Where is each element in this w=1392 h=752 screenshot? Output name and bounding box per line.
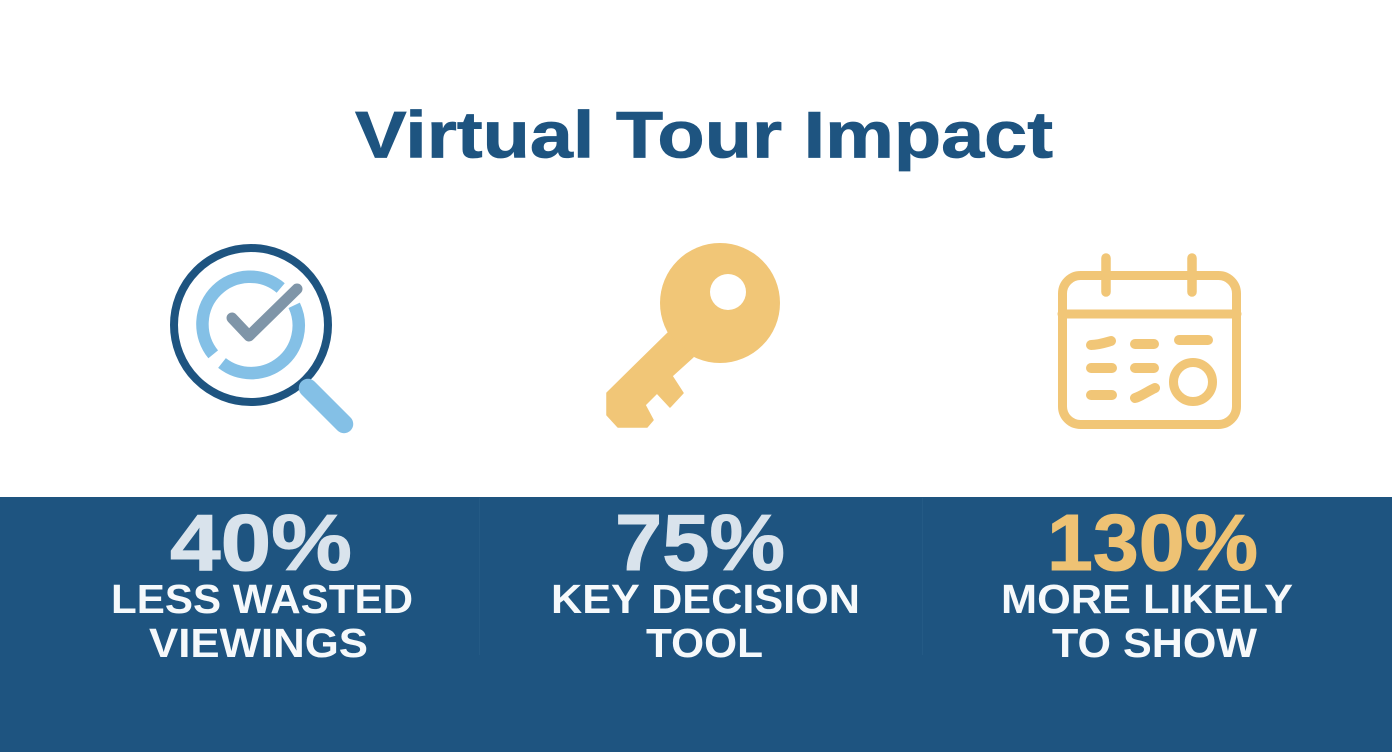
- stat: 75% key decision tool: 75%: [615, 498, 785, 587]
- stat: 75% key decision tool: TOOL: [646, 620, 763, 666]
- icon: key: [607, 243, 780, 427]
- stat: 40% less wasted viewings: LESS WASTED: [111, 576, 413, 622]
- stat: 130% more likely to show: 130%: [1047, 498, 1258, 587]
- stat: 75% key decision tool: [551, 498, 860, 666]
- title: Virtual Tour Impact: [355, 98, 1053, 172]
- stats band: [0, 497, 1392, 752]
- stat: 75% key decision tool: KEY DECISION: [551, 576, 860, 622]
- stat: 40% less wasted viewings: [111, 498, 413, 666]
- stat: 130% more likely to show: [1001, 498, 1293, 666]
- stat: 130% more likely to show: MORE LIKELY: [1001, 576, 1293, 622]
- stat: 130% more likely to show: TO SHOW: [1052, 620, 1257, 666]
- stat: 40% less wasted viewings: VIEWINGS: [149, 620, 368, 666]
- icon: magnifying glass with check: [174, 248, 344, 424]
- stat: 40% less wasted viewings: 40%: [170, 498, 352, 587]
- icon: calendar: [1062, 258, 1237, 424]
